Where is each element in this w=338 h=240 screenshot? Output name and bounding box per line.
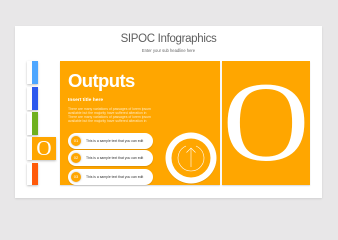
list item 3: 03 — [74, 174, 78, 178]
tab: outputs active — [27, 137, 56, 160]
body text: available but the majority have suffered alteration in — [68, 111, 146, 115]
list item 1: This is a sample text that you can edit — [86, 139, 143, 143]
body text: There are many variations of passages of lorem ipsum — [68, 115, 151, 119]
slide card — [15, 26, 322, 198]
tab: suppliers — [27, 61, 38, 84]
list item 2: 02 — [74, 155, 78, 160]
list item 1: 01 — [74, 138, 78, 143]
list item 2 — [68, 150, 153, 166]
body text — [68, 106, 151, 123]
heading: Outputs: Outputs — [68, 70, 135, 91]
list item 2: This is a sample text that you can edit — [86, 156, 143, 160]
tab: customers — [27, 163, 38, 185]
list item 1 — [68, 133, 153, 149]
subtitle: Enter your sub headline here — [142, 48, 195, 53]
title: SIPOC Infographics — [121, 33, 216, 45]
list item 3: This is a sample text that you can edit — [86, 174, 143, 178]
panel: outputs content — [60, 61, 220, 185]
tab: inputs — [27, 86, 38, 110]
body text: There are many variations of passages of lorem ipsum — [68, 106, 151, 110]
icon: upload arrow in ring — [166, 132, 216, 184]
tab: outputs active: O — [36, 136, 52, 160]
panel: large letter — [222, 61, 310, 185]
list item 3 — [68, 168, 153, 184]
large letter O: O — [222, 61, 309, 184]
tab: process — [27, 112, 38, 135]
body text: available but the majority have suffered alteration in — [68, 119, 146, 123]
subheading: Insert title here — [68, 98, 103, 103]
